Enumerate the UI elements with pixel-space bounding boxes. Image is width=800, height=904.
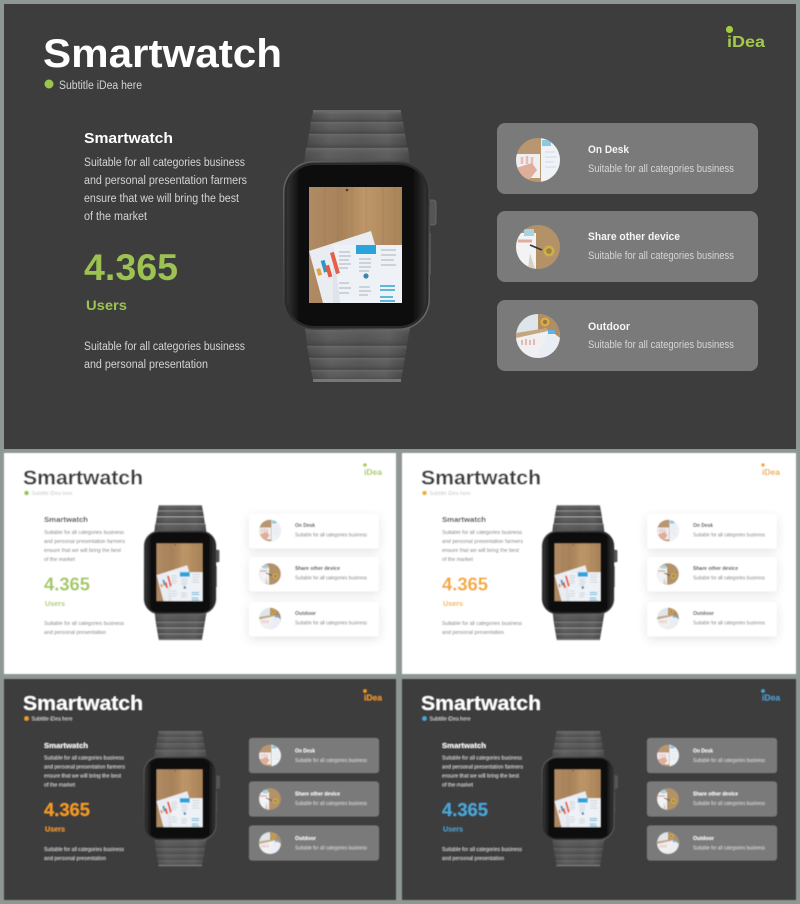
panel: dark slide, orange accent <box>4 679 396 900</box>
text block: heading and description <box>44 515 125 563</box>
text block: heading and description: of the market <box>84 211 148 223</box>
subtitle with bullet: Subtitle iDea here <box>32 491 72 497</box>
card: Share other device <box>249 557 379 592</box>
text block: heading and description: of the market <box>44 782 75 788</box>
logo: iDea: iDea <box>727 34 765 51</box>
text block: footer note <box>44 621 124 636</box>
card: Share other device <box>249 782 379 816</box>
card: On Desk <box>249 738 379 773</box>
statistic: 4.365 users <box>84 247 178 313</box>
text block: heading and description: ensure that we will bring the best <box>442 548 519 554</box>
smartwatch image <box>542 505 617 640</box>
card: Outdoor: Outdoor <box>588 321 631 333</box>
logo: iDea: iDea <box>364 468 383 477</box>
text block: heading and description: ensure that we will bring the best <box>44 774 121 780</box>
logo: iDea: iDea <box>762 468 781 477</box>
text block: heading and description: ensure that we will bring the best <box>44 548 121 554</box>
card: Outdoor: Outdoor <box>295 836 317 842</box>
text block: footer note: Suitable for all categories business <box>44 847 124 853</box>
card: On Desk: Suitable for all categories business <box>693 758 765 764</box>
text block: heading and description: Suitable for all categories business <box>84 157 245 169</box>
text block: heading and description: Suitable for all categories business <box>442 530 522 536</box>
text block: heading and description: and personal presentation farmers <box>44 764 125 770</box>
text block: footer note: and personal presentation <box>442 630 504 636</box>
text block: heading and description <box>442 515 523 563</box>
text block: footer note <box>84 341 245 371</box>
logo: iDea <box>761 463 781 477</box>
card: Outdoor <box>647 602 777 636</box>
statistic: 4.365 users: Users <box>443 601 463 608</box>
card: Outdoor: Suitable for all categories business <box>693 620 765 626</box>
statistic: 4.365 users: 4.365 <box>442 799 488 820</box>
statistic: 4.365 users <box>442 574 488 608</box>
subtitle with bullet: Subtitle iDea here <box>430 491 470 497</box>
text block: heading and description: ensure that we will bring the best <box>84 193 240 205</box>
card: On Desk <box>647 738 777 773</box>
text block: heading and description: Suitable for all categories business <box>44 756 124 762</box>
text block: heading and description: Smartwatch <box>84 130 173 147</box>
card: On Desk: Suitable for all categories business <box>693 532 765 538</box>
text block: footer note: Suitable for all categories business <box>44 621 124 627</box>
text block: heading and description: and personal presentation farmers <box>442 764 523 770</box>
card: Outdoor: Suitable for all categories business <box>588 339 734 351</box>
card: Outdoor <box>249 602 379 636</box>
title: Smartwatch <box>23 468 143 490</box>
card: Share other device <box>647 557 777 592</box>
title: Smartwatch <box>23 693 143 715</box>
statistic: 4.365 users: Users <box>443 826 463 834</box>
logo: iDea: iDea <box>762 694 781 702</box>
statistic: 4.365 users: 4.365 <box>84 247 178 288</box>
text block: heading and description: and personal presentation farmers <box>442 539 523 545</box>
text block: footer note: Suitable for all categories business <box>442 621 522 627</box>
smartwatch image <box>283 110 436 382</box>
card: Outdoor: Suitable for all categories business <box>295 846 367 852</box>
card: On Desk: On Desk <box>693 523 714 529</box>
text block: footer note <box>442 847 522 862</box>
text block: heading and description: of the market <box>442 782 473 788</box>
text block: heading and description: Suitable for all categories business <box>442 756 522 762</box>
logo: iDea <box>363 463 383 477</box>
title: Smartwatch <box>43 32 282 76</box>
logo: iDea: iDea <box>364 694 383 702</box>
card: Share other device: Share other device <box>588 231 680 243</box>
logo: iDea <box>726 26 765 51</box>
subtitle with bullet: Subtitle iDea here <box>32 716 72 722</box>
card: On Desk: Suitable for all categories business <box>295 758 367 764</box>
card: Outdoor: Suitable for all categories business <box>295 620 367 626</box>
card: On Desk: On Desk <box>295 523 316 529</box>
card: Share other device: Suitable for all categories business <box>295 801 367 807</box>
card: On Desk <box>647 514 777 548</box>
card: On Desk <box>497 123 758 194</box>
text block: footer note: Suitable for all categories business <box>442 847 522 853</box>
text block: heading and description: Suitable for all categories business <box>44 530 124 536</box>
statistic: 4.365 users <box>44 799 90 834</box>
card: Outdoor <box>647 826 777 860</box>
text block: footer note: and personal presentation <box>84 359 208 371</box>
subtitle with bullet: Subtitle iDea here <box>430 716 470 722</box>
text block: heading and description: Smartwatch <box>442 515 486 524</box>
card: Share other device: Share other device <box>295 792 340 798</box>
subtitle with bullet: Subtitle iDea here <box>59 80 142 92</box>
statistic: 4.365 users: 4.365 <box>44 574 90 594</box>
logo: iDea <box>761 689 781 702</box>
statistic: 4.365 users: Users <box>45 601 65 608</box>
panel: white slide, green accent <box>4 453 396 674</box>
card: On Desk: On Desk <box>693 748 714 754</box>
text block: heading and description: and personal presentation farmers <box>84 175 247 187</box>
card: On Desk: Suitable for all categories business <box>295 532 367 538</box>
smartwatch image <box>144 505 219 640</box>
statistic: 4.365 users: 4.365 <box>44 799 90 820</box>
statistic: 4.365 users <box>44 574 90 608</box>
statistic: 4.365 users: Users <box>45 826 65 834</box>
title: Smartwatch <box>421 693 541 715</box>
statistic: 4.365 users: Users <box>86 297 127 313</box>
card: Share other device: Share other device <box>295 566 340 572</box>
statistic: 4.365 users: 4.365 <box>442 574 488 594</box>
card: Share other device: Suitable for all categories business <box>693 576 765 582</box>
text block: footer note: and personal presentation <box>442 856 504 862</box>
smartwatch image <box>144 731 219 866</box>
card: Outdoor: Outdoor <box>693 836 715 842</box>
text block: footer note <box>44 847 124 862</box>
card: Share other device <box>497 211 758 282</box>
card: Share other device <box>647 782 777 816</box>
card: Share other device: Suitable for all categories business <box>295 576 367 582</box>
text block: heading and description: and personal presentation farmers <box>44 539 125 545</box>
text block: heading and description <box>84 130 247 223</box>
text block: heading and description: Smartwatch <box>44 741 88 750</box>
text block: heading and description: of the market <box>442 557 473 563</box>
text block: heading and description: of the market <box>44 557 75 563</box>
text block: footer note <box>442 621 522 636</box>
card: On Desk: On Desk <box>588 144 630 156</box>
text block: footer note: and personal presentation <box>44 856 106 862</box>
card: Share other device: Share other device <box>693 566 738 572</box>
text block: footer note: and personal presentation <box>44 630 106 636</box>
title: Smartwatch <box>421 468 541 490</box>
text block: heading and description: ensure that we will bring the best <box>442 774 519 780</box>
text block: heading and description <box>44 741 125 788</box>
text block: footer note: Suitable for all categories business <box>84 341 245 353</box>
card: On Desk: Suitable for all categories business <box>588 163 734 175</box>
text block: heading and description: Smartwatch <box>44 515 88 524</box>
card: Outdoor <box>249 826 379 860</box>
logo: iDea <box>363 689 383 702</box>
panel: large dark slide, green accent <box>4 4 796 449</box>
card: On Desk <box>249 514 379 548</box>
card: Share other device: Suitable for all categories business <box>693 801 765 807</box>
card: Outdoor: Outdoor <box>693 611 715 617</box>
panel: white slide, amber accent <box>402 453 796 674</box>
card: Outdoor <box>497 300 758 371</box>
card: On Desk: On Desk <box>295 748 316 754</box>
text block: heading and description <box>442 741 523 788</box>
smartwatch image <box>542 731 617 866</box>
card: Share other device: Suitable for all categories business <box>588 250 734 262</box>
panel: dark slide, blue accent <box>402 679 796 900</box>
statistic: 4.365 users <box>442 799 488 834</box>
card: Outdoor: Suitable for all categories business <box>693 846 765 852</box>
card: Share other device: Share other device <box>693 792 738 798</box>
text block: heading and description: Smartwatch <box>442 741 486 750</box>
card: Outdoor: Outdoor <box>295 611 317 617</box>
